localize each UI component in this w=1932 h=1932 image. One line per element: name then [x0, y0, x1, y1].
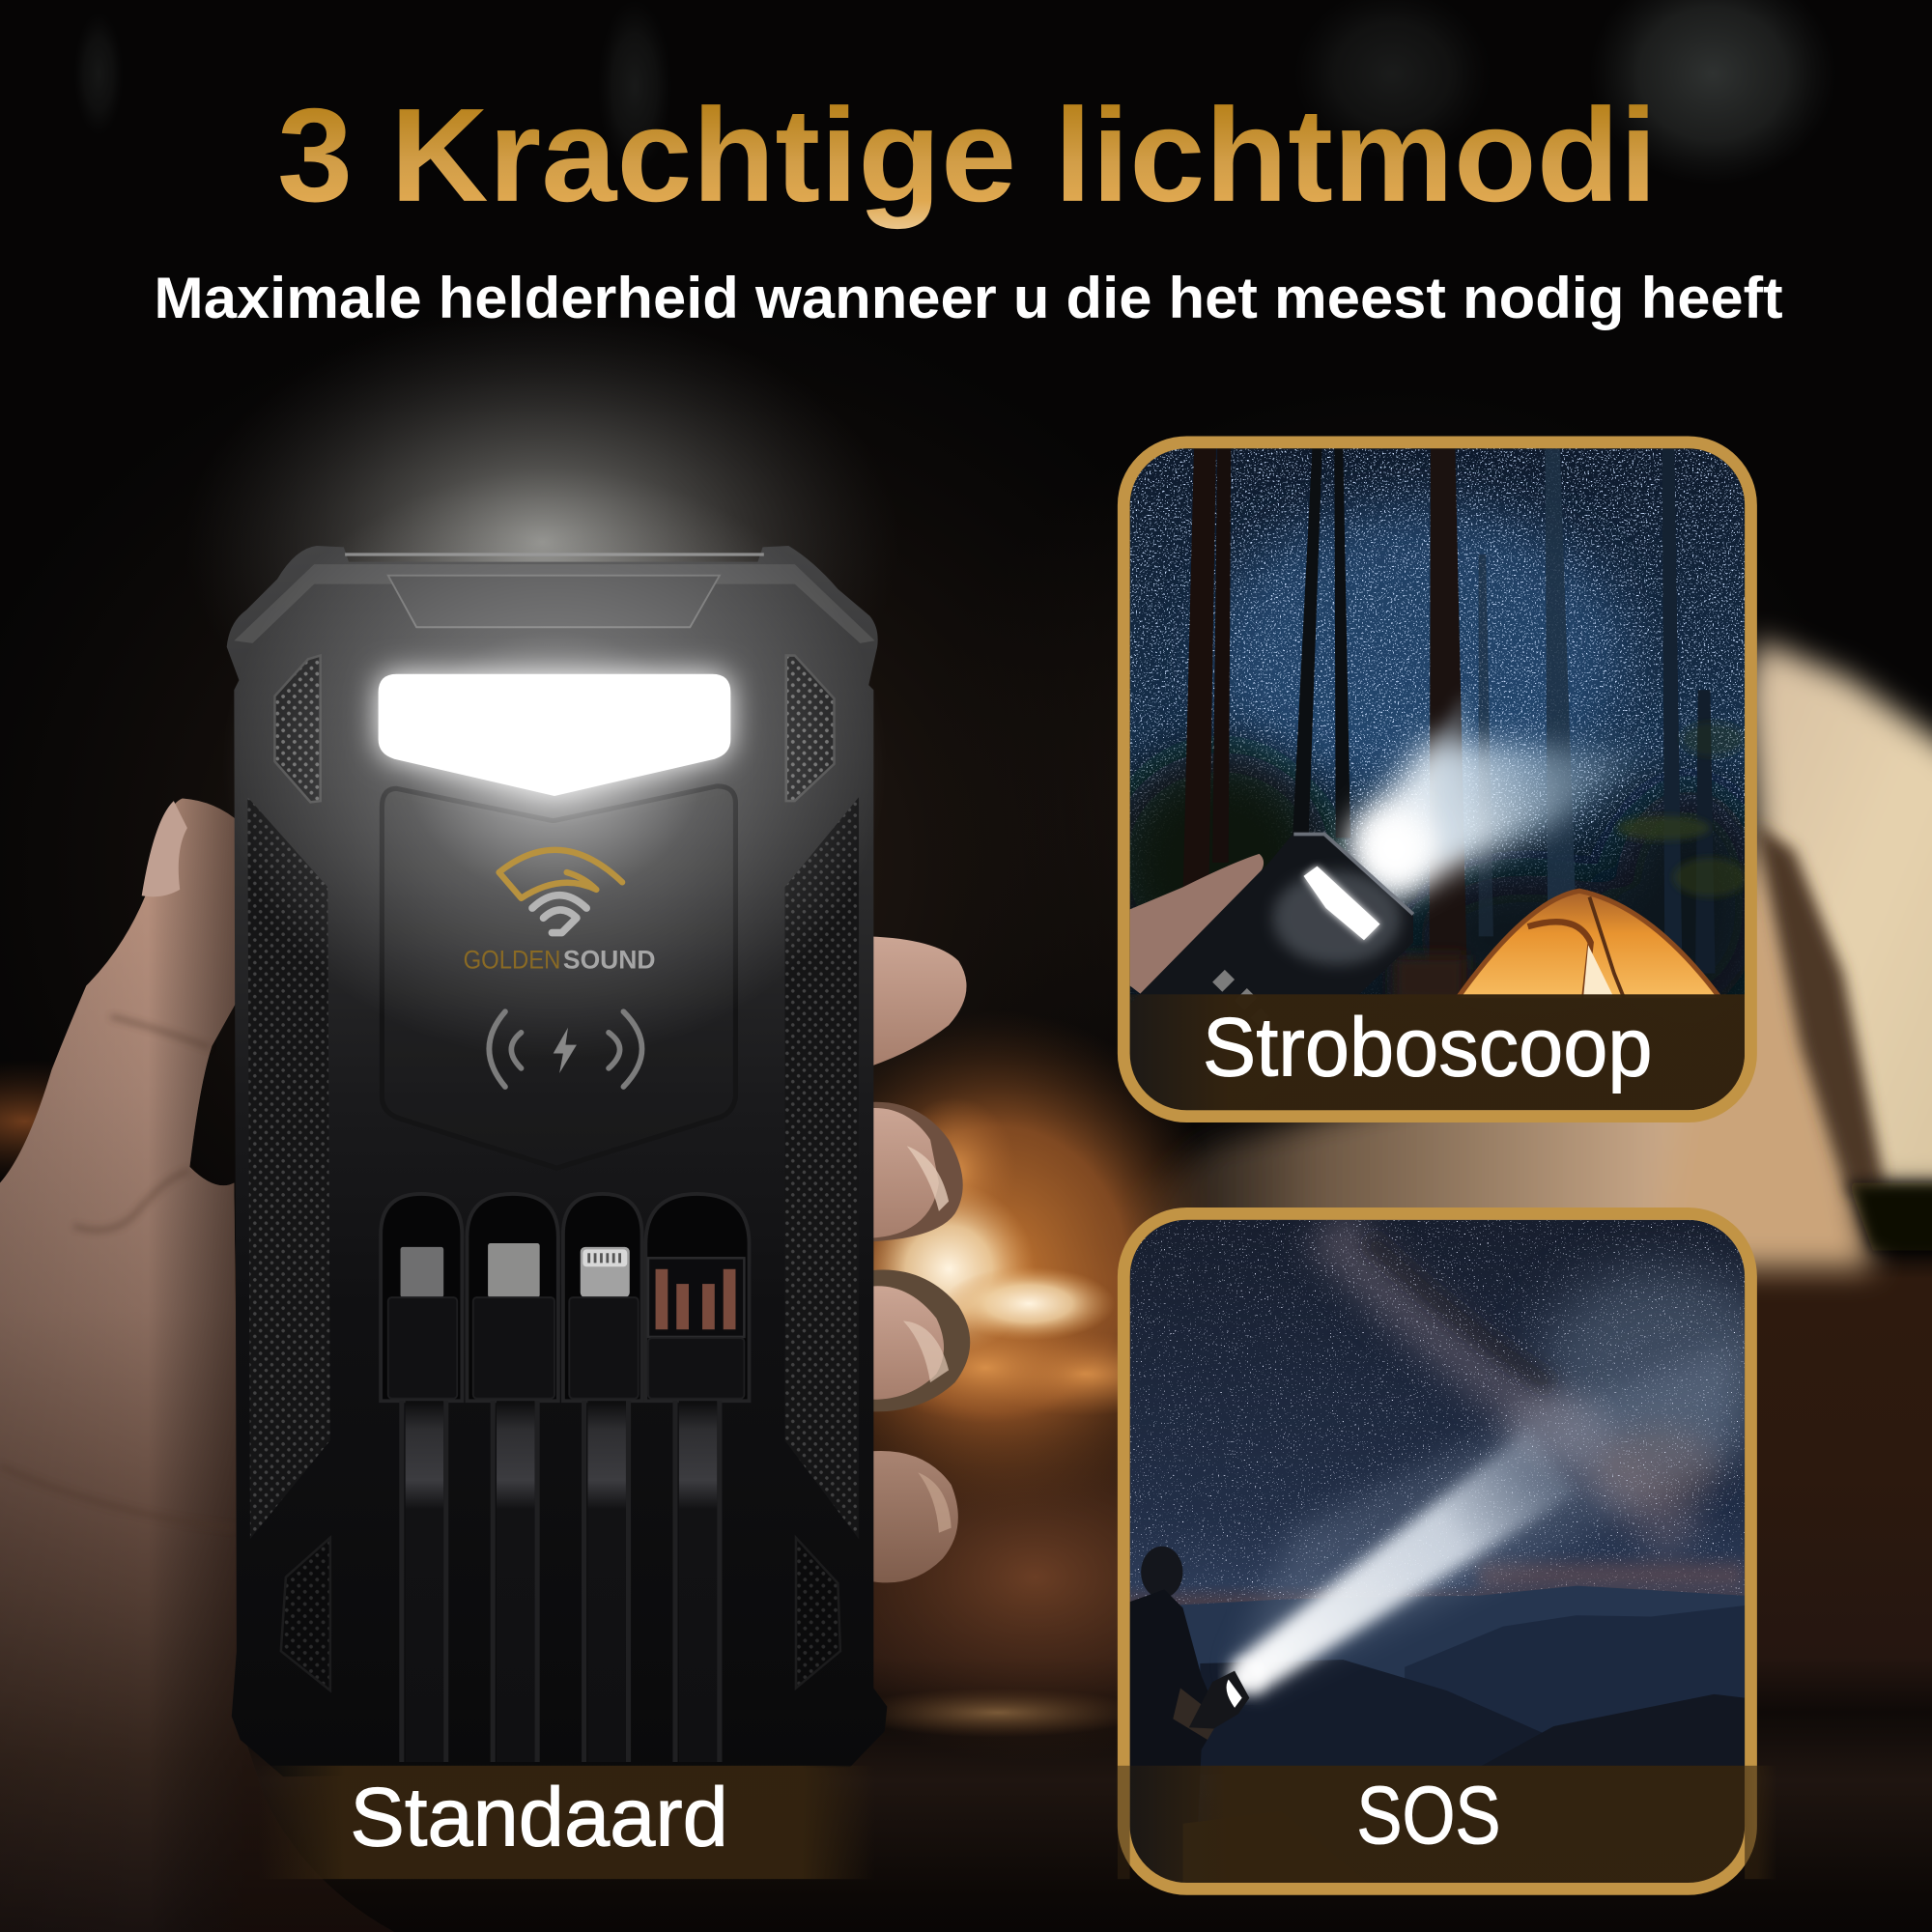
horizon glow: [1479, 1562, 1745, 1589]
power bank: [222, 469, 887, 1776]
hand holding the power bank: [0, 799, 970, 1932]
side grips: [247, 797, 859, 1539]
mountains: [1130, 1586, 1745, 1775]
palm creases: [0, 1016, 234, 1528]
hand in scene: [1130, 854, 1264, 998]
device in scene: [1189, 1671, 1249, 1729]
band overlap on border: [1118, 1766, 1776, 1879]
panel: Stroboscoop: [1109, 442, 1762, 1117]
title: 3 Krachtige lichtmodi: [277, 81, 1658, 230]
logo: [464, 850, 656, 975]
person: [1130, 1547, 1220, 1883]
lower grips: [281, 1538, 840, 1690]
caption band: [1130, 1766, 1745, 1883]
light beam: [1350, 690, 1658, 897]
card border: [1123, 442, 1750, 1117]
logo: SOUND: [563, 946, 656, 975]
tent shadow: [1848, 1182, 1932, 1251]
milky way: [1324, 1226, 1719, 1540]
thumbnail: [142, 801, 187, 896]
card border: [1123, 1213, 1750, 1889]
fingers: [854, 936, 970, 1582]
subtitle: Maximale helderheid wanneer u die het meest nodig heeft: [154, 266, 1783, 330]
logo: GOLDEN: [464, 946, 560, 975]
tent ridge: [1754, 823, 1886, 1195]
caption: SOS: [1356, 1770, 1501, 1861]
retractable cables: [402, 1401, 720, 1762]
starry sky: [1130, 1219, 1745, 1607]
sensor window: [388, 576, 720, 627]
panel: SOS: [1118, 1213, 1786, 1889]
lightning connector: [569, 1247, 639, 1399]
label: Standaard: Standaard: [350, 1771, 728, 1864]
fire: [764, 1010, 1233, 1528]
small upper grips: [274, 656, 835, 802]
tent: [1458, 891, 1720, 998]
caption band: [1130, 994, 1745, 1110]
rocky ground: [1182, 1811, 1368, 1883]
wireless charging icon: [489, 1011, 642, 1087]
device in scene: [1130, 833, 1414, 1030]
ground: [1392, 955, 1466, 1005]
dark tree line: [1109, 752, 1762, 1010]
USB-A connector: [648, 1258, 744, 1399]
light beam: [1230, 1343, 1737, 1695]
palm shading: [0, 799, 394, 1932]
wireless charging panel: [382, 786, 735, 1168]
tent: [1084, 639, 1932, 1269]
caption: Stroboscoop: [1203, 1001, 1652, 1094]
label: Standaard: [259, 1766, 875, 1879]
foliage: [1616, 722, 1747, 897]
micro USB connector: [388, 1247, 457, 1399]
palm and thumb: [0, 799, 394, 1932]
USB-C connector: [473, 1243, 554, 1399]
device body: [227, 546, 887, 1776]
tree trunks: [1182, 448, 1716, 994]
cable slots: [381, 1194, 750, 1401]
lamp glow on device: [222, 469, 887, 1060]
ground: [0, 1244, 1932, 1932]
night forest sky: [1130, 448, 1745, 1110]
lamp: [379, 674, 730, 796]
